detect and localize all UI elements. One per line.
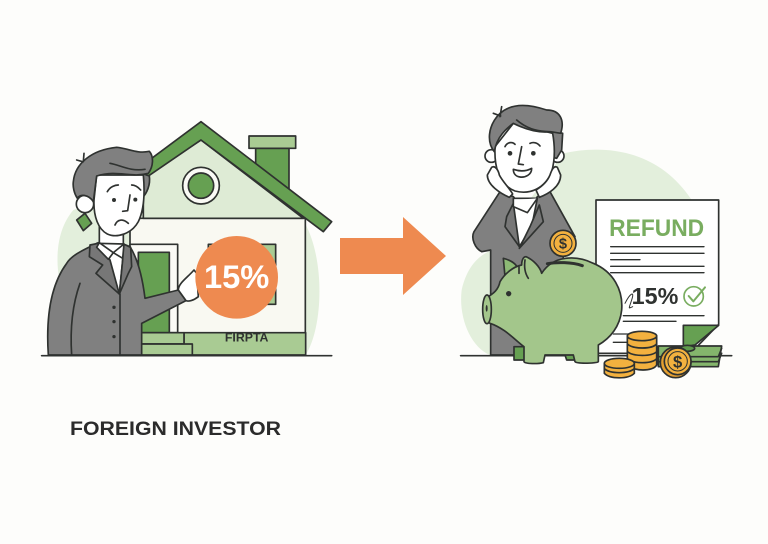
caption: FOREIGN INVESTOR: [70, 418, 281, 440]
gable: [143, 140, 303, 218]
lapels: [89, 243, 119, 294]
ears: [485, 150, 498, 162]
arrow: [340, 217, 446, 295]
ground line: [42, 353, 332, 358]
refund document: REFUND: [609, 215, 704, 242]
coin dropping into piggy bank: $: [559, 237, 567, 253]
buttons: [112, 306, 116, 338]
badge: 15%: [195, 236, 278, 319]
neck: [99, 225, 123, 247]
house wall: [130, 218, 305, 355]
face: [94, 175, 144, 236]
shirt: [513, 198, 537, 247]
background blob: [57, 177, 319, 355]
coin dropping into piggy bank: [550, 230, 576, 256]
background blob: [461, 150, 692, 355]
page fold: [683, 325, 719, 347]
suit and sleeve: [48, 243, 186, 355]
roof: [145, 122, 332, 232]
facial features: [505, 143, 540, 165]
ground line: [461, 353, 732, 358]
face: [495, 123, 554, 192]
refund document: [596, 200, 719, 353]
refund amount: 15%: [632, 283, 679, 309]
facial features: [107, 185, 141, 225]
chimney: [249, 136, 296, 192]
collar: [97, 243, 124, 259]
hands: [487, 167, 513, 197]
ear: [76, 195, 94, 213]
green tag: [77, 213, 92, 231]
hair front: [489, 105, 562, 152]
piggy bank: [483, 257, 622, 364]
hair front: [73, 147, 152, 202]
cash stack: [658, 345, 722, 367]
panel: refund scene with happy investor: [461, 105, 732, 378]
worried investor: [48, 147, 198, 355]
coin stacks: [604, 331, 657, 378]
steps and base: [142, 333, 306, 355]
hand: [178, 270, 198, 301]
badge: 15%: 15%: [204, 258, 269, 295]
FIRPTA label: FIRPTA: [225, 330, 269, 344]
hair back: [142, 173, 150, 197]
house window: [208, 244, 276, 304]
coin on cash: $: [673, 352, 683, 371]
hair back: [550, 130, 563, 158]
check icon: [684, 287, 705, 306]
happy investor: [473, 105, 575, 355]
coin on cash: [660, 347, 691, 378]
door: [130, 244, 178, 333]
suit: [473, 192, 575, 355]
panel: house scene with worried investor: [42, 122, 332, 356]
round window: [183, 167, 219, 204]
shirt: [97, 243, 123, 294]
